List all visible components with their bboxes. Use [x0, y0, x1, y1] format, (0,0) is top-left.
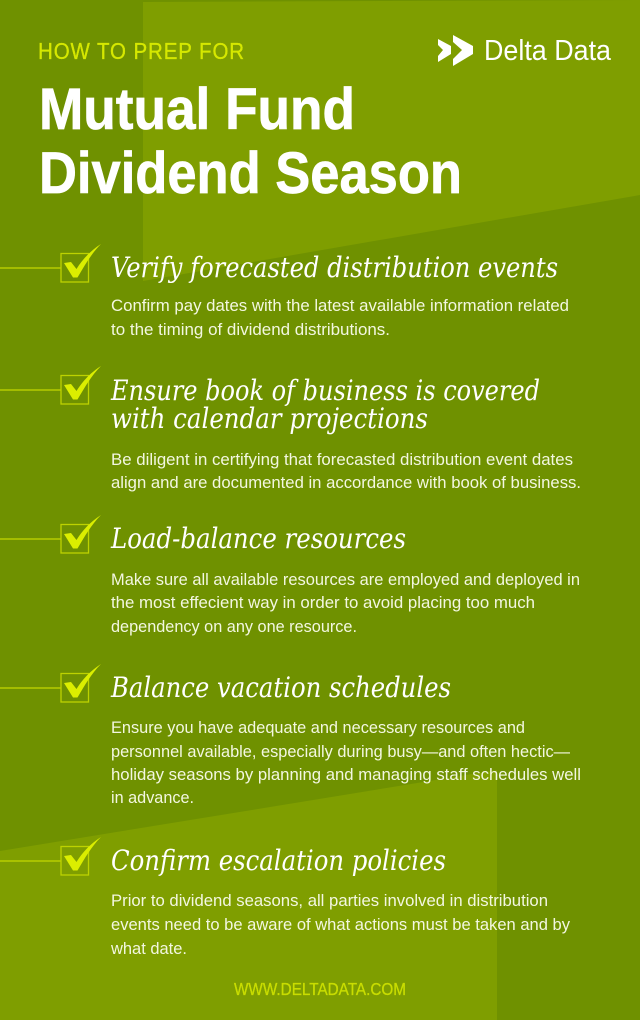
- icon: checkbox: [0, 515, 101, 553]
- heading: Confirm escalation policies: [111, 844, 446, 877]
- body text: the most effecient way in order to avoid placing too much: [111, 593, 535, 612]
- icon: checkbox: [0, 837, 101, 875]
- item: verify forecasted distribution events: [0, 244, 569, 339]
- body text: Be diligent in certifying that forecasted distribution event dates: [111, 450, 573, 469]
- title: [39, 77, 462, 206]
- body text: [111, 718, 581, 807]
- item: balance vacation schedules: [0, 664, 581, 807]
- item: load-balance resources: [0, 515, 580, 636]
- body text: personnel available, especially during busy—and often hectic—: [111, 742, 570, 761]
- eyebrow heading: HOW TO PREP FOR: [38, 38, 245, 64]
- icon: checkbox: [0, 664, 101, 702]
- body text: dependency on any one resource.: [111, 617, 357, 636]
- body text: [111, 450, 581, 492]
- body text: what date.: [110, 939, 187, 958]
- footer url: WWW.DELTADATA.COM: [234, 979, 406, 999]
- title: Mutual Fund: [39, 77, 355, 142]
- logo: Delta Data: [438, 35, 612, 67]
- heading: Balance vacation schedules: [110, 671, 451, 704]
- heading: Load-balance resources: [110, 522, 406, 555]
- icon: checkbox: [0, 244, 101, 282]
- icon: checkbox: [0, 366, 101, 404]
- icon: logo chevrons: [438, 35, 473, 66]
- body text: Confirm pay dates with the latest available information related: [111, 296, 569, 315]
- heading: with calendar projections: [111, 402, 428, 435]
- item: confirm escalation policies: [0, 837, 570, 958]
- title: Dividend Season: [39, 141, 462, 206]
- heading: Ensure book of business is covered: [110, 374, 540, 407]
- body text: Make sure all available resources are employed and deployed in: [111, 570, 580, 589]
- logo wordmark: Delta Data: [484, 35, 612, 67]
- body text: holiday seasons by planning and managing staff schedules well: [111, 765, 581, 784]
- heading: Verify forecasted distribution events: [111, 251, 558, 284]
- body text: [110, 891, 570, 958]
- body text: align and are documented in accordance with book of business.: [111, 473, 581, 492]
- heading: [110, 374, 540, 435]
- body text: Ensure you have adequate and necessary resources and: [111, 718, 525, 737]
- body text: [111, 296, 569, 339]
- body text: events need to be aware of what actions must be taken and by: [111, 915, 570, 934]
- item: ensure book of business is covered: [0, 366, 581, 492]
- body text: in advance.: [111, 788, 194, 807]
- body text: Prior to dividend seasons, all parties involved in distribution: [111, 891, 548, 910]
- body text: [111, 570, 580, 636]
- body text: to the timing of dividend distributions.: [111, 320, 390, 339]
